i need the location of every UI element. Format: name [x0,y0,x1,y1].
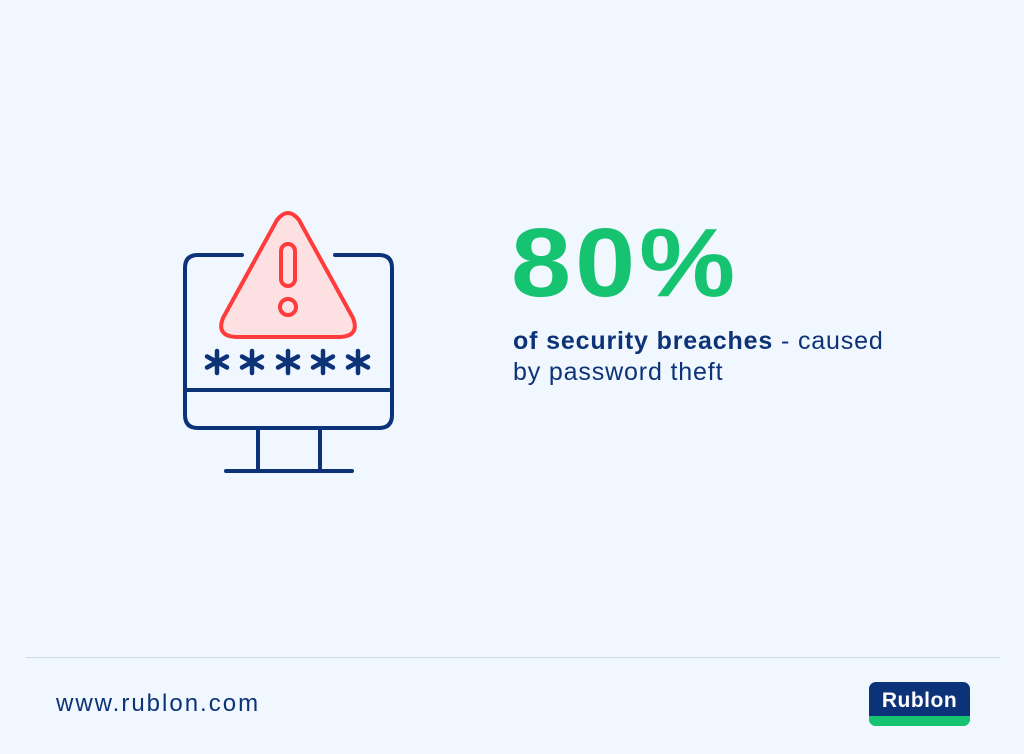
text block: description: of security breaches - caused [513,327,884,355]
logo: Rublon [869,682,970,726]
icon: warning triangle [221,213,355,337]
stat: 80%: 80% [511,208,739,316]
text block: description [513,327,884,386]
divider [26,657,1000,658]
text block: description: by password theft [513,358,723,386]
footer url: www.rublon.com [56,690,260,717]
logo: Rublon: Rublon [882,689,957,712]
icon: monitor with warning [183,211,394,473]
asterisks [207,351,368,373]
